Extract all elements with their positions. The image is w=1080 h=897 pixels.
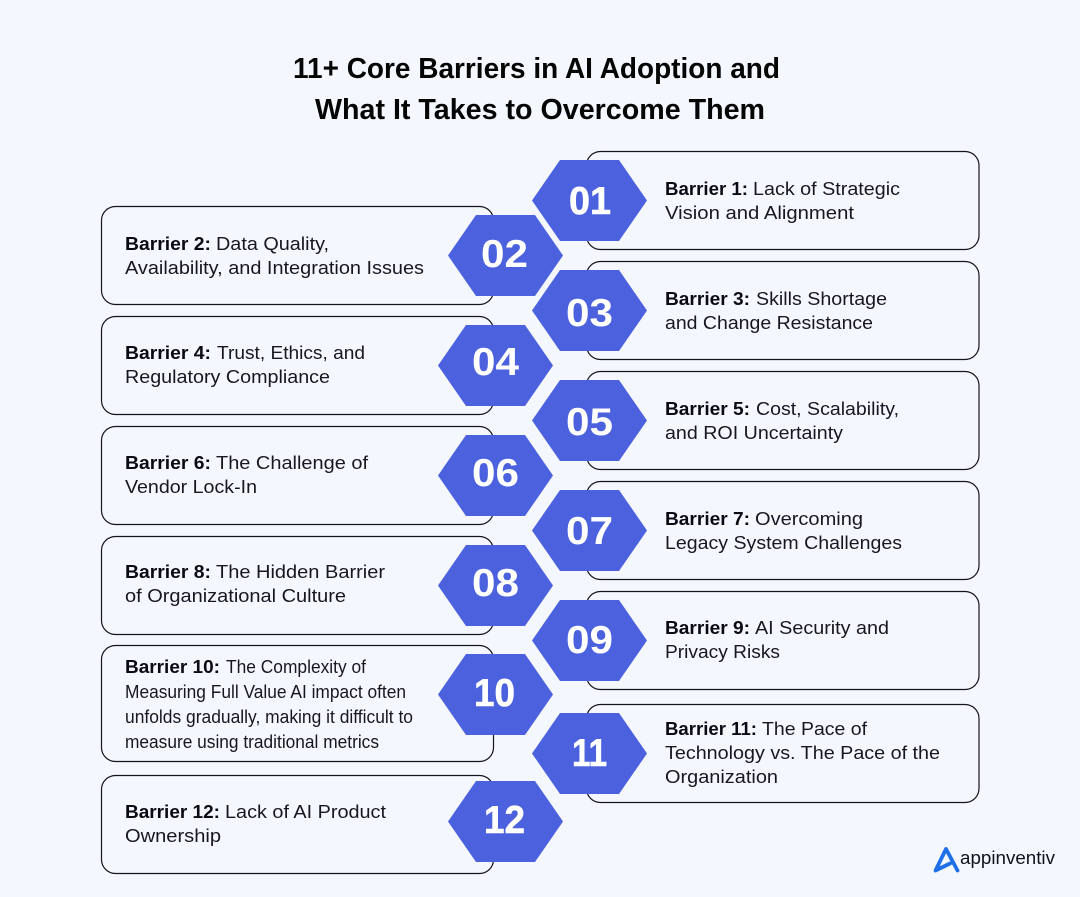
- panel: barrier 12: Lack of AI Product: [225, 801, 386, 822]
- panel: barrier 7: Overcoming: [755, 508, 863, 529]
- panel: barrier 8: The Hidden Barrier: [216, 561, 385, 582]
- panel: barrier 5: Cost, Scalability,: [756, 398, 899, 419]
- panel: barrier 10: [102, 646, 494, 762]
- hexagon 10: [438, 654, 553, 735]
- panel: barrier 12: Barrier 12:: [125, 801, 220, 822]
- panel: barrier 1: Barrier 1:: [665, 178, 748, 199]
- panel: barrier 4: Regulatory Compliance: [125, 366, 330, 387]
- hexagon 03: [532, 270, 647, 351]
- panel: barrier 10: unfolds gradually, making it difficult to: [125, 706, 413, 727]
- panel: barrier 11: [586, 704, 979, 802]
- panel: barrier 3: Barrier 3:: [665, 288, 750, 309]
- panel: barrier 5: and ROI Uncertainty: [665, 422, 844, 443]
- panel: barrier 7: Legacy System Challenges: [665, 532, 902, 553]
- panel: barrier 6: The Challenge of: [216, 452, 369, 473]
- panel: barrier 5: Barrier 5:: [665, 398, 750, 419]
- panel: barrier 1: Lack of Strategic: [753, 178, 900, 199]
- hexagon 04: 04: [472, 341, 520, 384]
- panel: barrier 8: of Organizational Culture: [125, 585, 346, 606]
- hexagon 02: 02: [481, 233, 528, 276]
- hexagon 07: [532, 490, 647, 571]
- panel: barrier 2: Barrier 2:: [125, 233, 211, 254]
- logo: appinventiv: appinventiv: [960, 848, 1055, 868]
- panel: barrier 2: Availability, and Integration Issues: [125, 257, 424, 278]
- panel: barrier 2: [102, 206, 494, 304]
- panel: barrier 10: The Complexity of: [226, 656, 367, 677]
- panel: barrier 9: Barrier 9:: [665, 617, 750, 638]
- panel: barrier 10: measure using traditional metrics: [125, 731, 379, 752]
- panel: barrier 4: Barrier 4:: [125, 342, 211, 363]
- panel: barrier 5: [586, 372, 979, 470]
- panel: barrier 8: Barrier 8:: [125, 561, 211, 582]
- hexagon 08: [438, 545, 553, 626]
- hexagon 11: [532, 713, 647, 794]
- panel: barrier 6: [102, 426, 494, 524]
- hexagon 10: 10: [474, 672, 515, 715]
- hexagon 06: [438, 435, 553, 516]
- hexagon 08: 08: [472, 562, 519, 605]
- panel: barrier 1: Vision and Alignment: [665, 202, 854, 223]
- hexagon 07: 07: [566, 510, 613, 553]
- panel: barrier 9: AI Security and: [755, 617, 889, 638]
- hexagon 06: 06: [472, 452, 519, 495]
- panel: barrier 7: [586, 482, 979, 580]
- hexagon 03: 03: [566, 292, 613, 335]
- panel: barrier 12: Ownership: [125, 825, 221, 846]
- panel: barrier 11: The Pace of: [762, 718, 868, 739]
- panel: barrier 10: Barrier 10:: [125, 656, 220, 677]
- panel: barrier 9: [586, 592, 979, 690]
- panel: barrier 11: Technology vs. The Pace of the: [665, 742, 940, 763]
- panel: barrier 6: Vendor Lock-In: [125, 476, 257, 497]
- panel: barrier 7: Barrier 7:: [665, 508, 750, 529]
- hexagon 11: 11: [572, 732, 607, 775]
- panel: barrier 1: [586, 152, 979, 250]
- hexagon 01: 01: [569, 180, 611, 223]
- panel: barrier 12: [102, 776, 494, 874]
- panel: barrier 4: [102, 316, 494, 414]
- panel: barrier 8: [102, 536, 494, 634]
- hexagon 05: [532, 380, 647, 461]
- panel: barrier 11: Organization: [665, 766, 778, 787]
- hexagon 09: 09: [566, 619, 613, 662]
- title: What It Takes to Overcome Them: [315, 94, 765, 126]
- panel: barrier 2: Data Quality,: [216, 233, 329, 254]
- panel: barrier 3: and Change Resistance: [665, 312, 873, 333]
- panel: barrier 11: Barrier 11:: [665, 718, 757, 739]
- panel: barrier 6: Barrier 6:: [125, 452, 211, 473]
- title: [293, 53, 780, 126]
- logo: appinventiv: [936, 848, 1055, 870]
- panel: barrier 4: Trust, Ethics, and: [217, 342, 365, 363]
- hexagon 05: 05: [566, 401, 613, 444]
- panel: barrier 10: Measuring Full Value AI impact often: [125, 681, 406, 702]
- hexagon 12: [448, 781, 563, 862]
- hexagon 04: [438, 325, 553, 406]
- hexagon 02: [448, 215, 563, 296]
- hexagon 09: [532, 600, 647, 681]
- panel: barrier 3: Skills Shortage: [756, 288, 887, 309]
- hexagon 12: 12: [484, 799, 525, 842]
- hexagon 01: [532, 160, 647, 241]
- title: 11+ Core Barriers in AI Adoption and: [293, 53, 780, 85]
- panel: barrier 9: Privacy Risks: [665, 641, 780, 662]
- panel: barrier 3: [586, 262, 979, 360]
